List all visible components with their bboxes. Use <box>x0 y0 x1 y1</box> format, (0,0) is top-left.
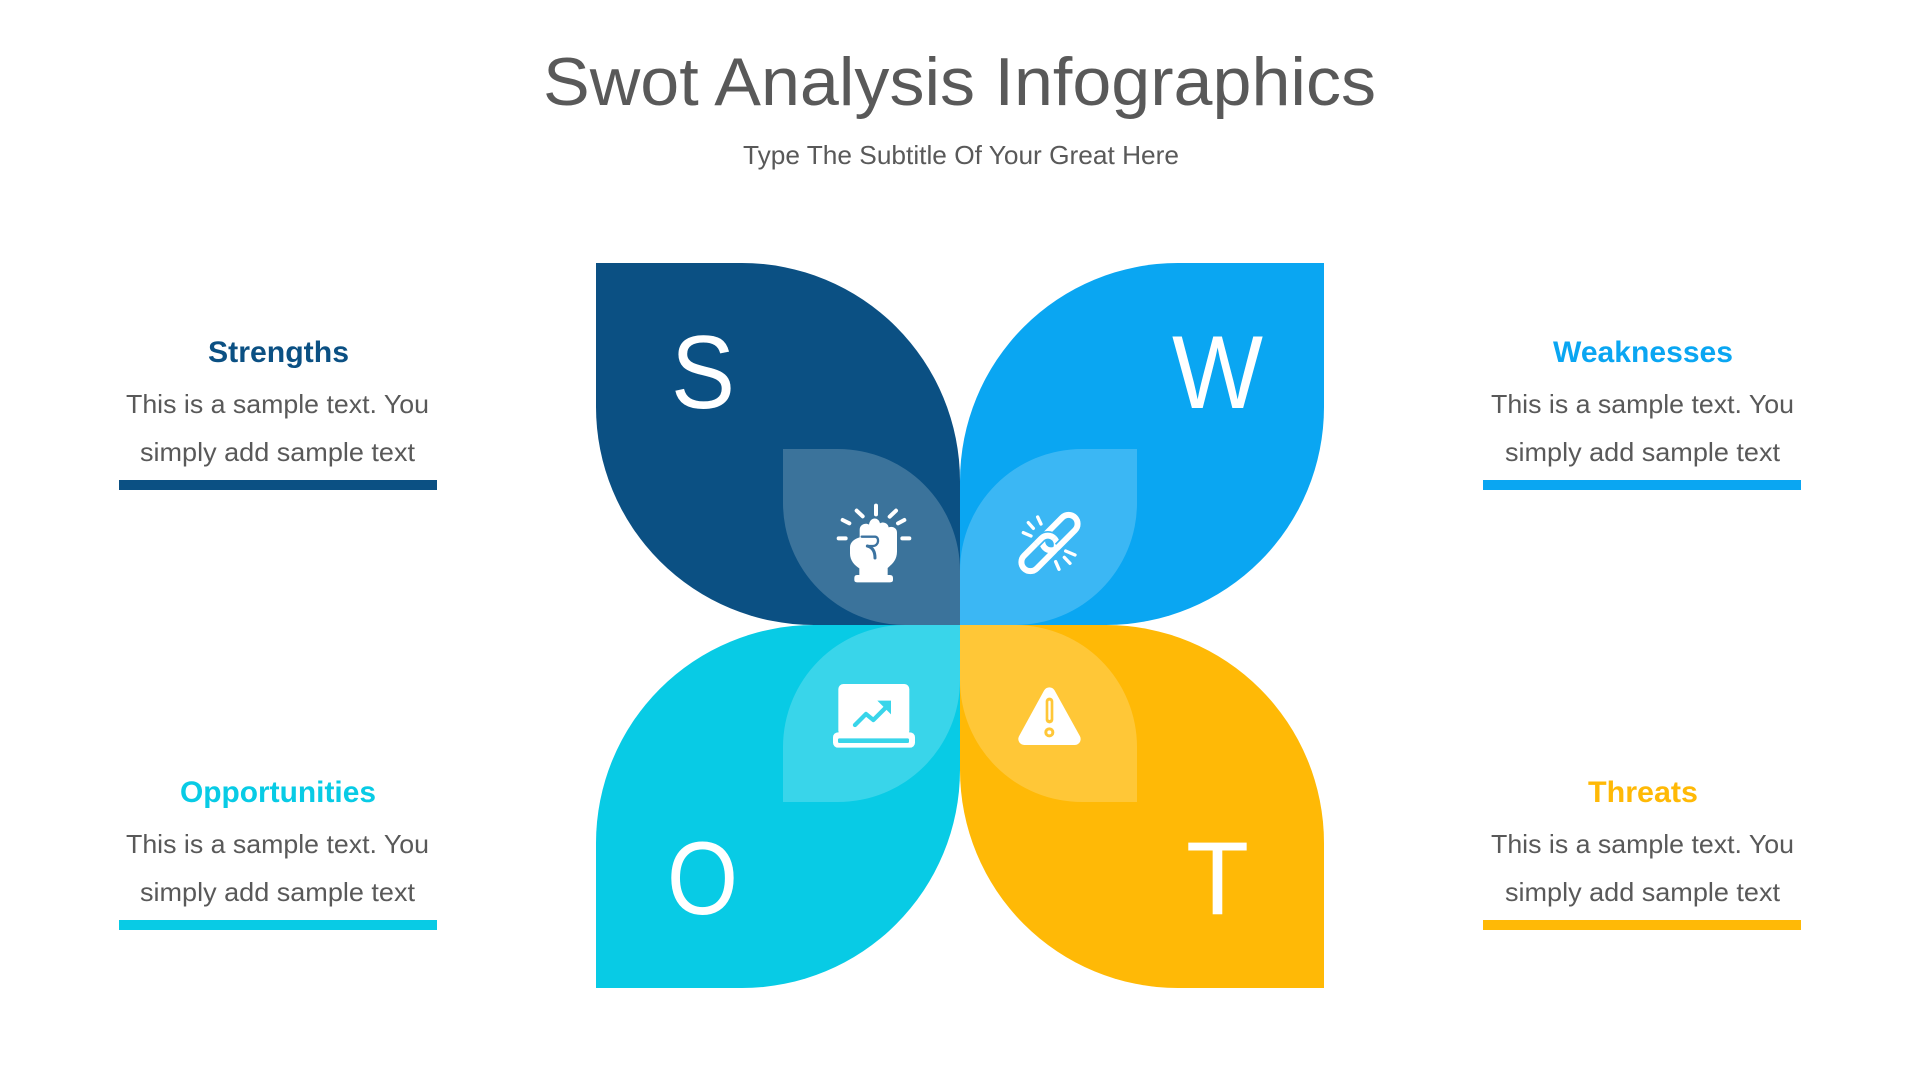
heading: weaknesses: Weaknesses <box>1553 336 1733 369</box>
petal: S strengths <box>596 263 960 625</box>
heading: strengths: Strengths <box>208 336 349 369</box>
letter T: T <box>1186 821 1249 937</box>
body text: weaknesses: This is a sample text. You <box>1491 389 1794 419</box>
panel: threats text <box>1483 776 1801 930</box>
body text: strengths <box>126 389 429 467</box>
panel: weaknesses text <box>1483 336 1801 490</box>
letter W: W <box>1172 315 1263 431</box>
underline bar: strengths <box>119 480 437 490</box>
panel: strengths text <box>119 336 437 490</box>
body text: threats: simply add sample text <box>1505 877 1781 907</box>
body text: threats <box>1491 829 1794 907</box>
inner petal: T <box>960 625 1137 802</box>
petal: W weaknesses <box>960 263 1324 625</box>
body text: weaknesses: simply add sample text <box>1505 437 1781 467</box>
body text: opportunities <box>126 829 429 907</box>
icon: warning triangle <box>1024 693 1075 739</box>
underline bar: threats <box>1483 920 1801 930</box>
subtitle: Type The Subtitle Of Your Great Here <box>743 140 1179 170</box>
underline bar: opportunities <box>119 920 437 930</box>
petal: T threats <box>960 625 1324 988</box>
body text: strengths: This is a sample text. You <box>126 389 429 419</box>
body text: opportunities: simply add sample text <box>140 877 416 907</box>
letter S: S <box>671 315 735 431</box>
icon: laptop with rising chart <box>833 684 915 748</box>
body text: opportunities: This is a sample text. You <box>126 829 429 859</box>
underline bar: weaknesses <box>1483 480 1801 490</box>
icon: broken chain link <box>1018 511 1081 575</box>
body text: weaknesses <box>1491 389 1794 467</box>
icon: raised fist <box>839 506 909 582</box>
heading: opportunities: Opportunities <box>180 776 376 809</box>
heading: threats: Threats <box>1588 776 1698 809</box>
panel: opportunities text <box>119 776 437 930</box>
petal: O opportunities <box>596 625 960 988</box>
body text: strengths: simply add sample text <box>140 437 416 467</box>
letter O: O <box>667 821 738 937</box>
inner petal: W <box>960 449 1137 625</box>
body text: threats: This is a sample text. You <box>1491 829 1794 859</box>
title: Swot Analysis Infographics <box>543 44 1376 120</box>
inner petal: O <box>783 625 960 802</box>
inner petal: S <box>783 449 960 625</box>
